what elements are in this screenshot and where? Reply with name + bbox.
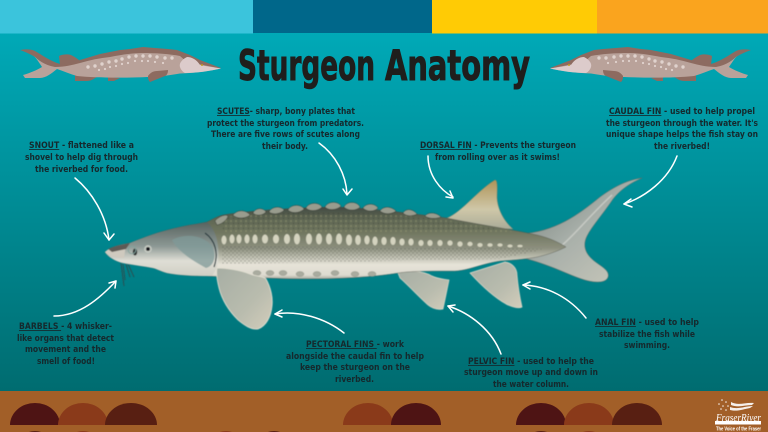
text: anal fin: swimming. — [624, 340, 670, 350]
text: snout: the riverbed for food. — [35, 164, 128, 174]
icon: left small sturgeon — [20, 47, 221, 82]
text: pectoral fins: alongside the caudal fin to help — [286, 351, 424, 361]
lateral scutes — [222, 234, 523, 248]
arrow: caudal fin — [624, 156, 677, 207]
text: caudal fin: CAUDAL FIN - used to help propel — [609, 106, 755, 116]
arrow: scutes — [319, 143, 352, 195]
text: pectoral fins: keep the sturgeon on the — [300, 362, 410, 372]
arrow: pectoral fin — [275, 310, 344, 333]
gill plate — [172, 236, 214, 268]
arrow: barbels — [54, 281, 116, 316]
text: dorsal fin: from rolling over as it swims! — [435, 152, 560, 162]
text: pectoral fins: riverbed. — [335, 374, 374, 384]
text: barbels: BARBELS - 4 whisker- — [19, 321, 112, 331]
text: scutes: protect the sturgeon from predators. — [207, 118, 364, 128]
caudal fin — [520, 178, 642, 282]
body — [105, 207, 566, 279]
belly and flank speckles — [222, 246, 545, 264]
arrow: anal fin — [523, 282, 586, 318]
icon: right small sturgeon — [550, 47, 751, 82]
text: snout — [25, 140, 138, 174]
text: snout: SNOUT - flattened like a — [29, 140, 134, 150]
arrow: snout — [75, 178, 114, 240]
text: pectoral fins: PECTORAL FINS - work — [306, 339, 404, 349]
text: barbels — [17, 321, 114, 366]
text: scutes: There are five rows of scutes along — [211, 129, 360, 139]
text: anal fin: ANAL FIN - used to help — [595, 317, 699, 327]
text: caudal fin: the riverbed! — [654, 141, 710, 151]
footer riverbed band — [0, 391, 768, 432]
logo: Fraser River Discovery Centre: FraserRiver — [715, 413, 761, 424]
top colour bands — [0, 0, 768, 34]
anal fin — [470, 262, 522, 308]
text: pelvic fin: the water column. — [493, 379, 569, 389]
dorsal fin — [447, 180, 513, 229]
text: anal fin — [595, 317, 699, 350]
text: pectoral fins — [286, 339, 424, 384]
text: scutes: their body. — [262, 141, 308, 151]
arrow: dorsal fin — [428, 156, 453, 198]
arrow: pelvic fin — [448, 305, 501, 354]
text: scutes — [207, 106, 364, 151]
lower scutes — [253, 270, 376, 276]
title: Anatomy — [385, 41, 530, 90]
tail highlight — [560, 195, 612, 247]
illustration: white sturgeon — [105, 178, 642, 329]
back mottling — [222, 212, 515, 232]
dorsal scutes — [215, 202, 441, 225]
semicircle pattern — [10, 403, 662, 432]
text: dorsal fin — [420, 140, 576, 162]
pectoral fin — [217, 268, 272, 329]
text: pelvic fin: sturgeon move up and down in — [464, 367, 598, 377]
text: barbels: movement and the — [25, 344, 106, 354]
eye and nostril — [128, 245, 152, 256]
text: anal fin: stabilize the fish while — [599, 329, 695, 339]
pelvic fin — [398, 271, 449, 309]
text: pelvic fin: PELVIC FIN - used to help the — [468, 356, 594, 366]
snout tip — [105, 245, 126, 258]
head — [105, 222, 218, 276]
text: pelvic fin — [464, 356, 598, 389]
text: barbels: like organs that detect — [17, 333, 114, 343]
logo: Fraser River Discovery Centre — [715, 399, 761, 432]
title: Sturgeon — [238, 41, 375, 90]
text: snout: shovel to help dig through — [25, 152, 138, 162]
text: caudal fin — [606, 106, 758, 151]
text: dorsal fin: DORSAL FIN - Prevents the sturgeon — [420, 140, 576, 150]
text: barbels: smell of food! — [37, 356, 95, 366]
barbels — [121, 263, 134, 286]
text: scutes: SCUTES- sharp, bony plates that — [217, 106, 355, 116]
